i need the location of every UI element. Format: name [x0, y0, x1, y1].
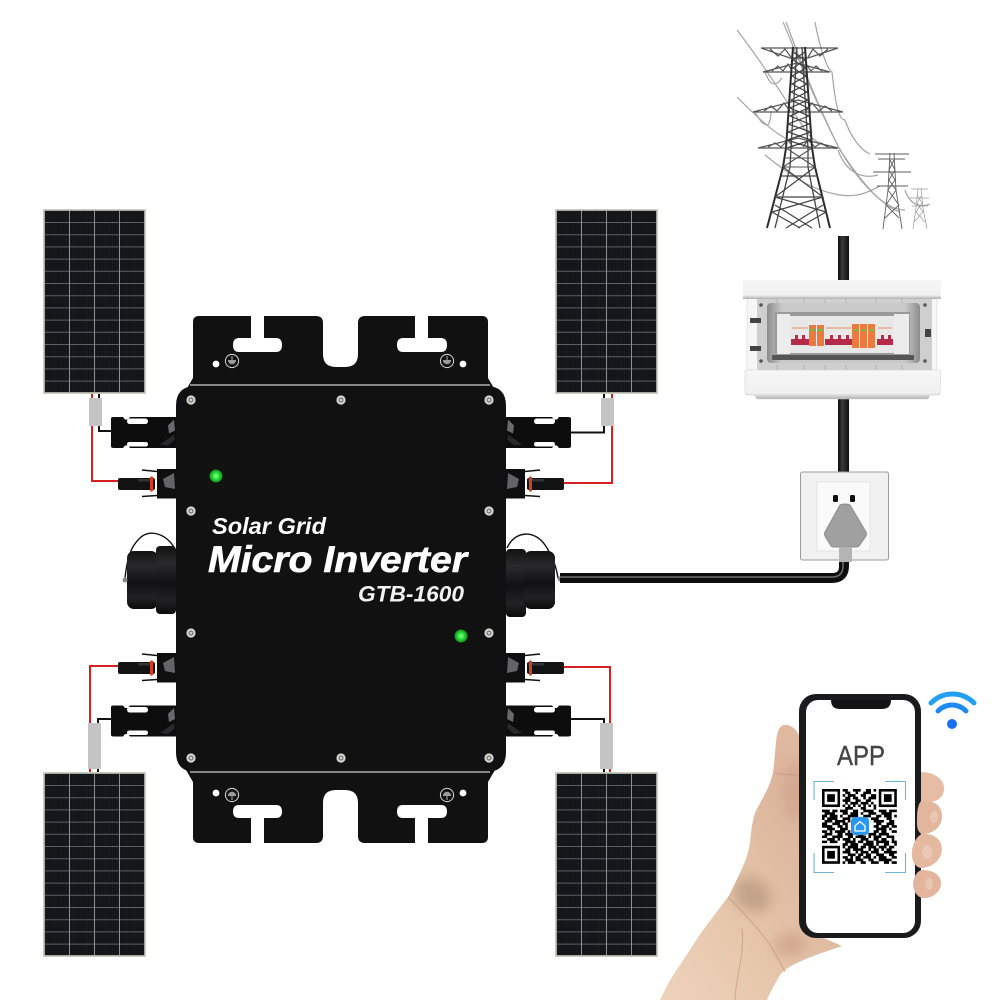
AC cable: inverter to socket: [560, 556, 844, 578]
solar panel: bottom left: [43, 772, 146, 957]
DC connector: bottom right large: [506, 706, 571, 736]
wiring: bottom right panel to inverter: [563, 667, 613, 772]
side strips: [777, 314, 790, 354]
wiring: top left panel to inverter: [89, 394, 118, 481]
scan frame corners: [814, 782, 906, 872]
icon: wifi signal: [931, 694, 974, 729]
cable: breaker box to socket: [838, 396, 849, 474]
main transmission tower: [753, 47, 843, 228]
inverter unit: [176, 316, 506, 843]
red breakers: [791, 335, 893, 345]
tower crossarms: [753, 48, 843, 148]
fingers: [912, 772, 944, 898]
wiring: top right panel to inverter: [563, 394, 614, 483]
DC connector: bottom left large: [111, 706, 176, 736]
screen heading: APP: [837, 740, 885, 771]
QR data modules: [822, 790, 897, 863]
socket holes: [833, 495, 855, 502]
mounting holes: [213, 361, 466, 796]
QR finder centers: [827, 794, 892, 859]
far tower body: [913, 188, 927, 229]
AC cap connector: left: [122, 533, 176, 614]
tower lattice: [787, 52, 812, 148]
index finger: [921, 772, 944, 802]
little finger: [913, 870, 941, 898]
middle tower arms: [873, 154, 911, 186]
lid: bottom: [745, 370, 941, 399]
DC connector: top left large: [111, 417, 176, 448]
wiring: bottom left panel to inverter: [88, 666, 118, 772]
QR code: [822, 790, 897, 863]
smart home app icon: [851, 817, 869, 835]
fingernail highlights: [922, 811, 938, 890]
box corner screws: [759, 303, 927, 363]
AC cap connector: right: [506, 534, 562, 617]
hand palm and thumb: [660, 725, 842, 1000]
plug stem: [839, 547, 852, 562]
small tower: middle: [873, 153, 911, 229]
power lines: [737, 22, 930, 212]
solar panel: top left: [43, 209, 146, 394]
screws: [186, 395, 494, 763]
smartphone: [799, 694, 921, 938]
breaker rail: [790, 316, 894, 353]
palm creases: [728, 772, 798, 1000]
phone screen: [806, 700, 915, 933]
phone notch: [831, 700, 891, 709]
box body: [747, 298, 937, 372]
socket face: [817, 482, 870, 551]
breaker box: [743, 280, 941, 399]
wall socket with plug: [800, 472, 888, 562]
side hinges: [750, 318, 931, 351]
DC connector: top right small: [506, 469, 564, 498]
phone frame: [799, 694, 921, 938]
inverter body: [176, 386, 506, 772]
solar panel: top right: [555, 209, 658, 394]
tower legs: [767, 47, 830, 228]
middle tower body: [883, 153, 902, 229]
label: Micro Inverter: Micro Inverter: [208, 539, 470, 580]
cable: tower to breaker box: [838, 236, 849, 282]
QR finder patterns: [823, 790, 896, 863]
DC connector: bottom left small: [118, 653, 176, 682]
small tower: far: [909, 188, 929, 229]
box frame: [757, 298, 932, 370]
socket plate: [800, 472, 888, 560]
green windows: [810, 329, 874, 332]
hand holding phone: [660, 725, 842, 1000]
label: Solar Grid: Solar Grid: [212, 513, 327, 539]
mounting plate: top: [186, 316, 495, 390]
mounting plate: bottom: [186, 770, 495, 843]
status LED: right: [454, 630, 468, 642]
ground symbols: [225, 354, 454, 802]
palm shading: [726, 760, 807, 957]
DC connector: top left small: [118, 469, 176, 498]
tray shadow band: [772, 355, 914, 360]
orange surge modules: [809, 324, 875, 348]
far tower arms: [909, 189, 929, 206]
DC connector: bottom right small: [506, 653, 564, 682]
middle finger: [917, 801, 942, 834]
lid: top: [743, 280, 941, 299]
bevel: [767, 303, 920, 363]
plug: [824, 504, 866, 547]
label: GTB-1600: GTB-1600: [358, 582, 464, 606]
DC connector: top right large: [506, 417, 571, 448]
status LED: left: [210, 470, 222, 482]
orange breaker labels: [792, 327, 892, 329]
tray: [775, 312, 910, 358]
solar panel: bottom right: [555, 772, 658, 957]
ring finger: [912, 834, 942, 868]
plate edge highlights: [190, 385, 490, 772]
frame segment marks: [777, 298, 902, 370]
